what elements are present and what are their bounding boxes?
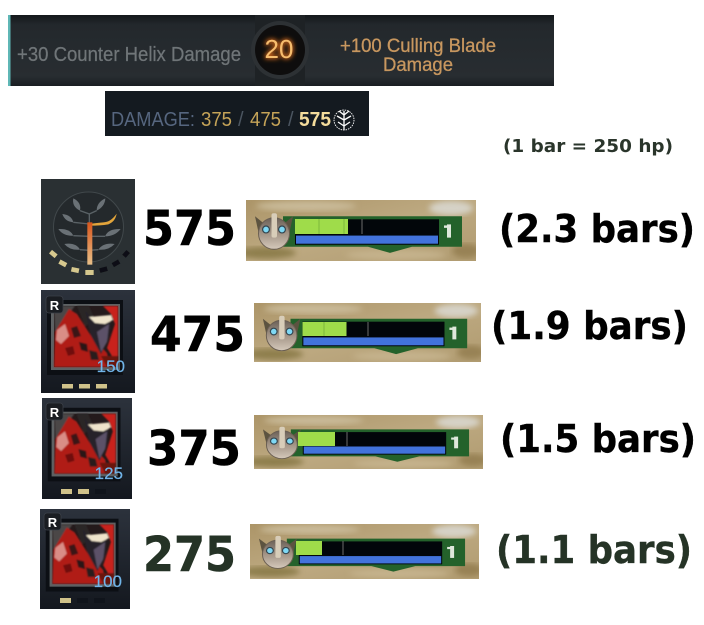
icon: culling blade level 2 [42, 398, 132, 499]
bars label: (1.5 bars) [500, 417, 696, 461]
row: 275 damage [40, 509, 692, 609]
icon: scepter tree [334, 110, 354, 130]
icon: culling blade level 2: 125 [95, 464, 123, 483]
talent option: culling blade [340, 35, 496, 76]
damage values strip: DAMAGE: [111, 109, 195, 131]
damage values strip: 375 [201, 109, 232, 131]
talent banner [8, 15, 554, 86]
level badge [251, 21, 309, 79]
icon: culling blade level 1: R [48, 515, 58, 530]
icon: culling blade level 1: 100 [94, 572, 122, 591]
scale note: (1 bar = 250 hp) [503, 136, 673, 157]
damage values strip [105, 91, 369, 136]
health bar [244, 415, 487, 469]
row: 475 damage [41, 290, 688, 393]
icon: scepter talent tree [41, 179, 135, 284]
icon: culling blade level 3: 150 [97, 357, 125, 376]
talent option: counter helix: +30 Counter Helix Damage [17, 44, 241, 66]
damage number: 275 [143, 527, 236, 583]
bars label: (2.3 bars) [499, 207, 695, 251]
health bar [236, 200, 480, 261]
icon: culling blade level 3 [41, 290, 135, 393]
icon: culling blade level 3: R [50, 298, 60, 313]
damage number: 475 [150, 307, 245, 363]
damage number: 375 [147, 421, 241, 477]
bars label: (1.9 bars) [491, 304, 688, 348]
talent option: culling blade: Damage [383, 54, 453, 76]
row: 375 damage [42, 398, 696, 499]
level badge: 20 [265, 34, 293, 64]
icon: culling blade level 2: R [50, 405, 60, 420]
damage values strip: / [288, 109, 294, 131]
bars label: (1.1 bars) [496, 528, 692, 572]
row: 575 damage [41, 179, 695, 284]
health bar [240, 524, 483, 579]
level badge: 20 [265, 34, 293, 64]
talent option: culling blade: +100 Culling Blade [340, 35, 496, 57]
damage values strip: 575 [299, 109, 331, 131]
damage values strip: / [238, 109, 244, 131]
damage number: 575 [143, 201, 236, 257]
health bar [244, 303, 485, 362]
icon: culling blade level 1 [40, 509, 130, 609]
damage values strip: 475 [250, 109, 281, 131]
